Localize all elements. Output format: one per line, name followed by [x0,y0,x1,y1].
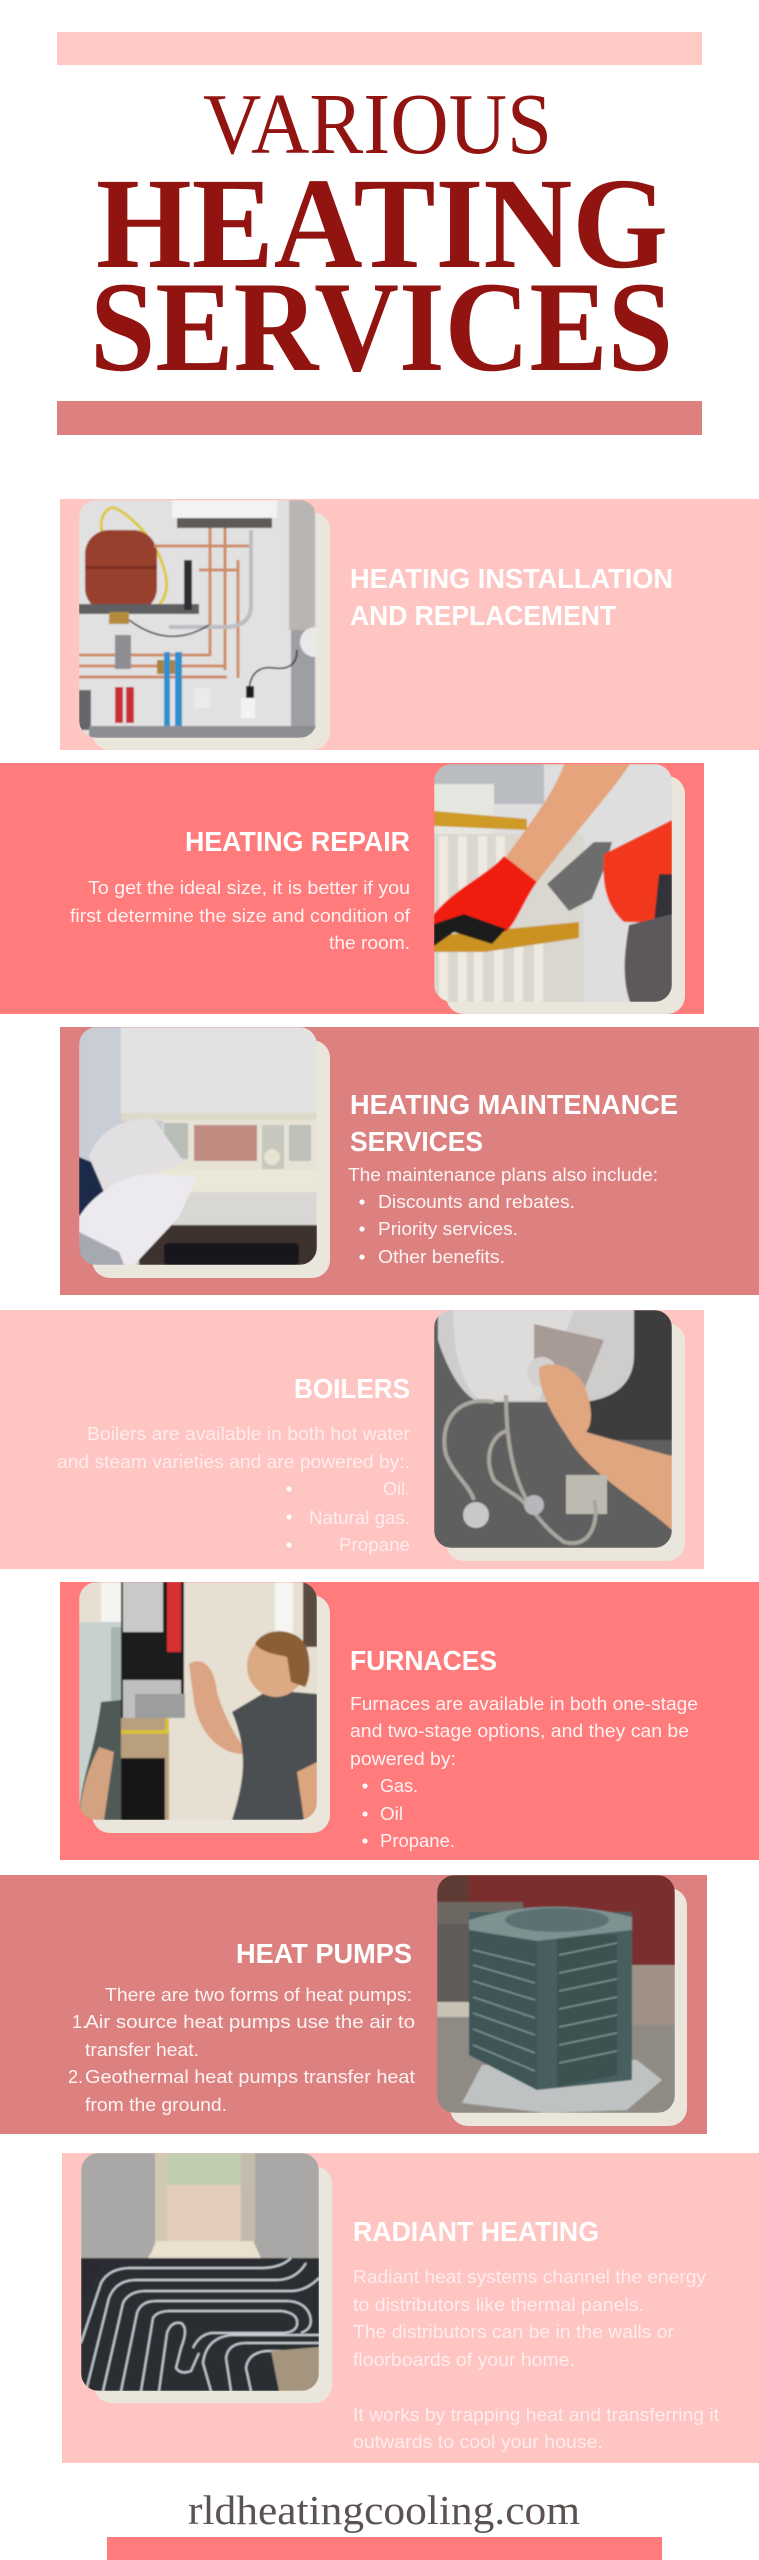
body text: Other benefits. [378,1247,505,1267]
photo: water heater with hand [434,1310,672,1548]
body text: outwards to cool your house. [353,2432,603,2452]
body text: The distributors can be in the walls or [353,2322,674,2342]
body text: 2. [68,2067,83,2087]
heading [350,563,673,631]
photo: technician at furnace [79,1582,317,1820]
body text: The maintenance plans also include: [348,1165,658,1185]
body text: Propane [339,1535,410,1555]
title [90,75,673,398]
top decorative bar [57,32,702,65]
body text: It works by trapping heat and transferring it [353,2405,719,2425]
body text: transfer heat. [85,2040,199,2060]
footer bar [107,2537,662,2560]
panel: heating maintenance services [60,1027,759,1295]
body text: to distributors like thermal panels. [353,2295,644,2315]
panel: radiant heating [62,2153,759,2463]
body text: floorboards of your home. [353,2350,575,2370]
heading: HEATING REPAIR [185,826,410,857]
body text: Discounts and rebates. [378,1192,575,1212]
heading: BOILERS [294,1373,410,1404]
panel: heating installation and replacement [60,499,759,750]
body text [70,878,411,953]
photo: wrench on manifold [434,764,672,1002]
heading [350,1089,678,1157]
body text [57,1424,410,1555]
heading: HEATING MAINTENANCE [350,1089,678,1120]
body text [348,1165,658,1267]
body text: from the ground. [85,2095,227,2115]
body text [350,1694,698,1851]
heading: HEAT PUMPS [236,1938,412,1969]
body text: Oil. [383,1479,410,1499]
heading: HEATING INSTALLATION [350,563,673,594]
heading: FURNACES [350,1645,497,1676]
body text: To get the ideal size, it is better if you [88,878,410,898]
body text: Oil [380,1804,403,1824]
body text: Propane. [380,1831,455,1851]
body text [353,2267,719,2452]
panel: heating repair [0,763,704,1014]
photo: outdoor heat pump unit [437,1875,675,2113]
body text: the room. [329,933,410,953]
photo: boiler pipework [79,500,330,738]
body text: 1. [72,2012,87,2032]
heading: SERVICES [350,1126,483,1157]
body text: and two-stage options, and they can be [350,1721,689,1741]
body text: Gas. [380,1776,418,1796]
footer website: rldheatingcooling.com [188,2487,580,2533]
body text: Furnaces are available in both one-stage [350,1694,698,1714]
body text: Priority services. [378,1219,518,1239]
photo: gloved hands on boiler panel [79,1027,317,1265]
body text: There are two forms of heat pumps: [105,1985,412,2005]
heading: RADIANT HEATING [353,2216,599,2247]
heading: AND REPLACEMENT [350,600,616,631]
body text: powered by: [350,1749,456,1769]
title: HEATING [96,152,668,296]
body text: and steam varieties and are powered by:. [57,1452,410,1472]
panel: boilers [0,1310,704,1569]
panel: furnaces [60,1582,759,1860]
body text: Radiant heat systems channel the energy [353,2267,706,2287]
body text: Natural gas. [309,1508,410,1528]
body text: Boilers are available in both hot water [87,1424,410,1444]
photo: underfloor heating pipes [81,2153,319,2391]
title: SERVICES [90,255,673,398]
title: VARIOUS [203,75,552,172]
body text: first determine the size and condition of [70,906,411,926]
panel: heat pumps [0,1875,707,2134]
body text [68,1985,415,2115]
body text: Geothermal heat pumps transfer heat [85,2067,415,2087]
bottom title bar [57,401,702,435]
body text: Air source heat pumps use the air to [85,2012,415,2032]
